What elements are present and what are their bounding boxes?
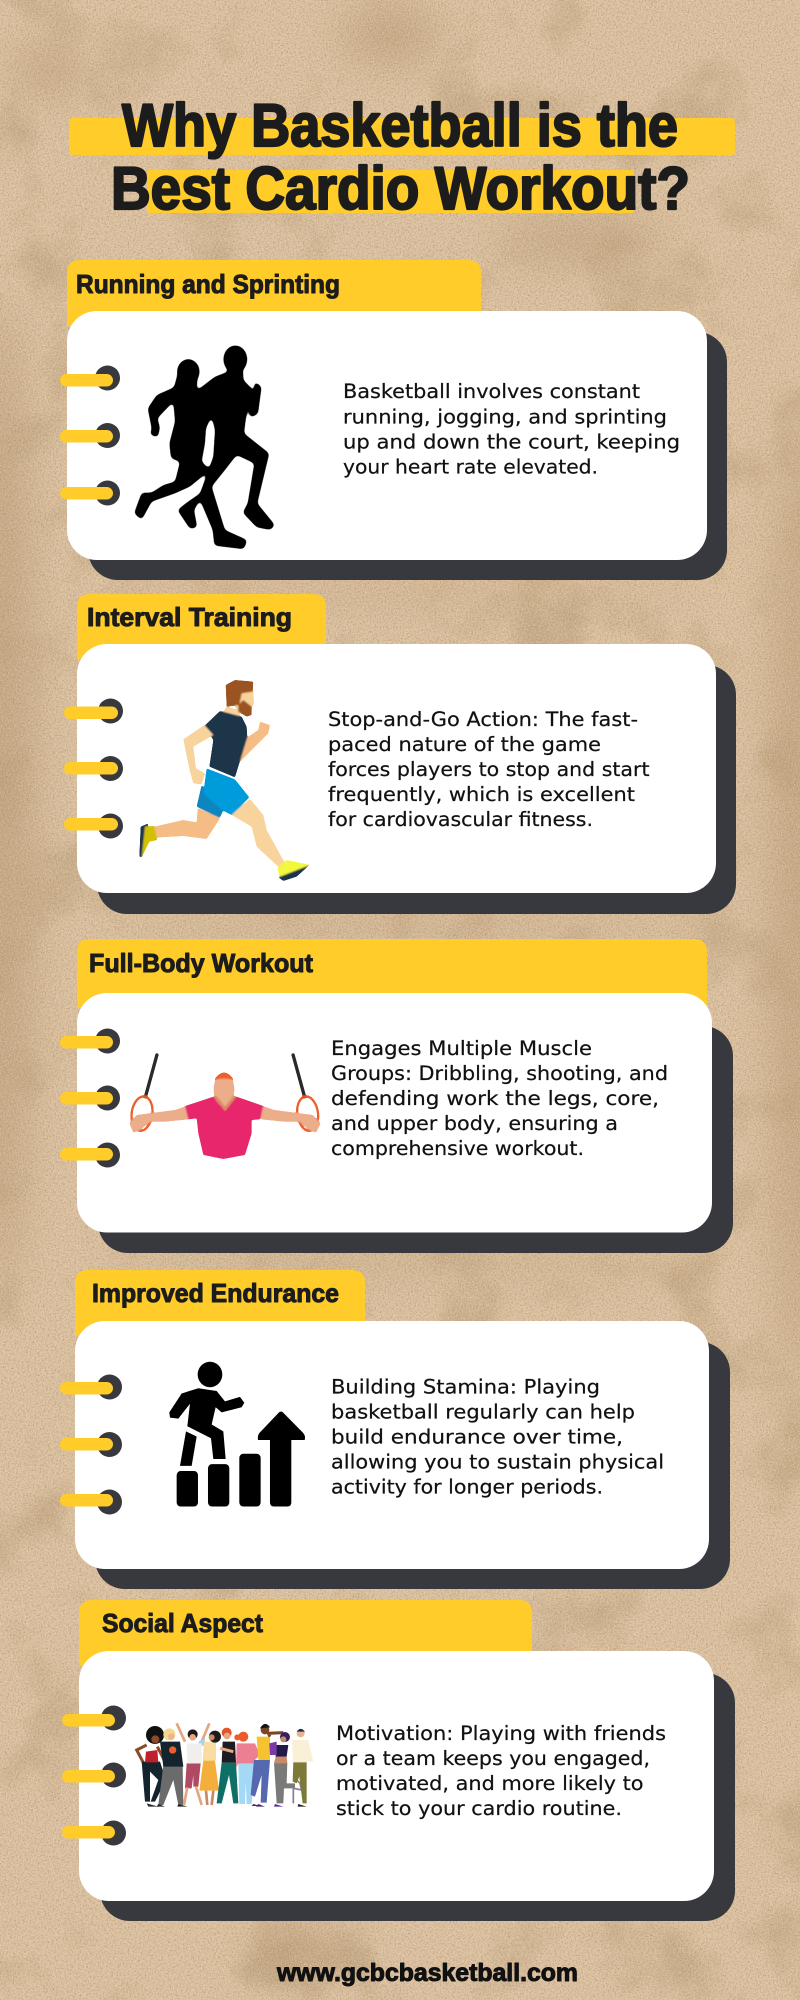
body text: for cardiovascular fitness. xyxy=(328,808,593,831)
body text: allowing you to sustain physical xyxy=(331,1450,664,1474)
heading: Interval Training xyxy=(87,602,292,632)
panel: improved endurance xyxy=(60,1270,730,1589)
card xyxy=(79,1651,714,1901)
card xyxy=(77,993,712,1232)
panel: interval training xyxy=(64,594,736,914)
heading tab xyxy=(67,260,481,326)
body text: Stop-and-Go Action: The fast- xyxy=(328,708,638,731)
body text: stick to your cardio routine. xyxy=(336,1797,622,1820)
title highlight: line 2 xyxy=(147,170,634,213)
body text xyxy=(343,380,680,478)
body text: running, jogging, and sprinting xyxy=(343,406,667,428)
spiral binding xyxy=(64,698,123,838)
heading tab xyxy=(77,594,326,659)
card xyxy=(75,1321,709,1569)
body text: motivated, and more likely to xyxy=(336,1772,644,1795)
body text: Groups: Dribbling, shooting, and xyxy=(331,1062,668,1085)
title text: line 1: Why Basketball is the xyxy=(122,92,678,159)
heading tab xyxy=(79,1600,532,1666)
card shadow xyxy=(97,665,736,914)
body text: up and down the court, keeping xyxy=(343,430,680,454)
heading: Running and Sprinting xyxy=(76,269,340,299)
body text xyxy=(328,708,650,831)
body text: paced nature of the game xyxy=(328,733,601,756)
card xyxy=(67,311,707,560)
title highlight: line 1 xyxy=(69,118,735,155)
heading: Full-Body Workout xyxy=(89,948,313,978)
body text: build endurance over time, xyxy=(331,1426,623,1448)
spiral binding xyxy=(60,366,120,506)
body text: and upper body, ensuring a xyxy=(331,1112,618,1135)
title xyxy=(69,92,735,222)
body text: Motivation: Playing with friends xyxy=(336,1722,666,1745)
card shadow xyxy=(100,1673,735,1921)
panel: full-body workout xyxy=(60,939,733,1253)
spiral binding xyxy=(60,1374,122,1514)
body text: Engages Multiple Muscle xyxy=(331,1037,592,1060)
body text: frequently, which is excellent xyxy=(328,783,635,806)
heading tab xyxy=(77,939,707,1008)
card shadow xyxy=(98,1026,733,1253)
heading: Improved Endurance xyxy=(92,1278,339,1308)
card shadow xyxy=(88,332,727,580)
body text: Basketball involves constant xyxy=(343,380,640,403)
heading tab xyxy=(75,1270,365,1336)
footer url: www.gcbcbasketball.com xyxy=(276,1959,578,1987)
body text: defending work the legs, core, xyxy=(331,1087,659,1110)
body text: comprehensive workout. xyxy=(331,1137,584,1160)
heading: Social Aspect xyxy=(102,1608,263,1638)
body text: your heart rate elevated. xyxy=(343,456,598,478)
icon: two runners silhouette xyxy=(134,345,275,549)
spiral binding xyxy=(60,1028,120,1168)
body text: activity for longer periods. xyxy=(331,1476,603,1498)
body text: Building Stamina: Playing xyxy=(331,1376,600,1398)
body text: forces players to stop and start xyxy=(328,758,650,781)
icon: man on gymnastic rings xyxy=(129,1053,321,1159)
panel: social aspect xyxy=(62,1600,735,1921)
spiral binding xyxy=(62,1706,126,1846)
icon: figure climbing rising bars xyxy=(169,1362,305,1507)
body text: or a team keeps you engaged, xyxy=(336,1747,650,1770)
icon: bearded runner xyxy=(139,680,311,881)
card shadow xyxy=(95,1342,730,1589)
body text xyxy=(331,1037,668,1160)
title text: line 2: Best Cardio Workout? xyxy=(111,155,690,222)
body text xyxy=(336,1722,666,1820)
card xyxy=(77,644,716,893)
panel: running and sprinting xyxy=(60,260,727,580)
icon: group of friends xyxy=(137,1723,313,1807)
body text xyxy=(331,1376,664,1498)
body text: basketball regularly can help xyxy=(331,1400,635,1424)
